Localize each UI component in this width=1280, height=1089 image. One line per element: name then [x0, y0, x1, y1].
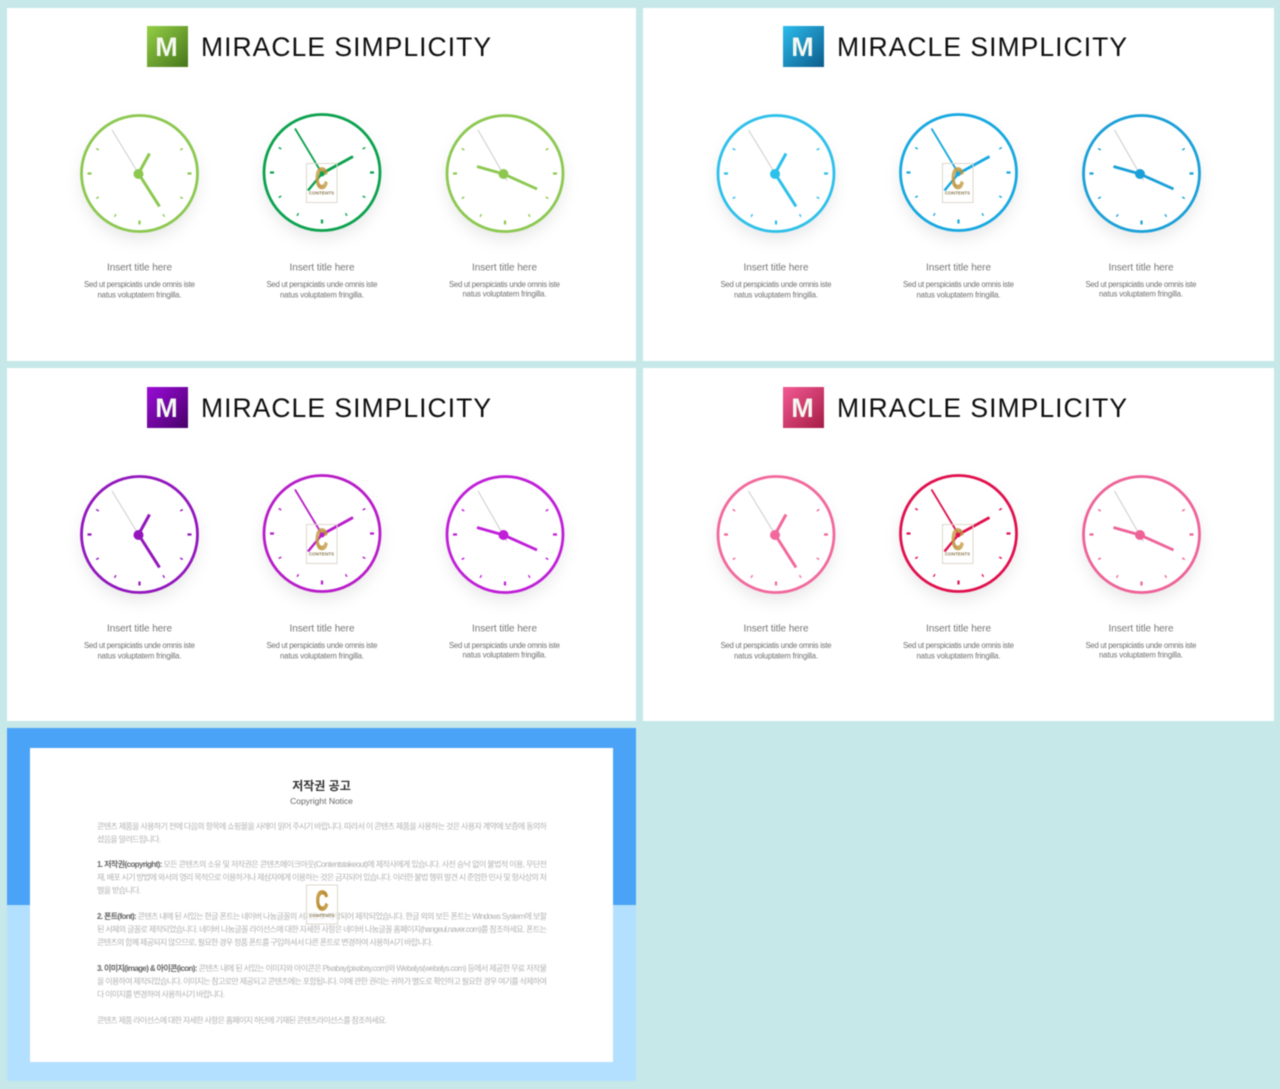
caption: green 2: Sed ut perspiciatis unde omnis iste: [266, 280, 378, 289]
caption: purple 2: Insert title here: [290, 624, 355, 634]
watermark: green panel: C: [315, 163, 328, 196]
icon: pink M logo: [783, 387, 824, 428]
heading: copyright title: 저작권 공고: [292, 778, 351, 793]
text block: section 1 copyright: 벌을 받습니다.: [97, 885, 141, 895]
watermark: green panel: [306, 163, 337, 202]
icon: blue M logo: M: [791, 32, 814, 62]
panel: copyright notice: [7, 728, 636, 1081]
caption: pink 1: Sed ut perspiciatis unde omnis iste: [720, 641, 832, 650]
caption: green 3: Sed ut perspiciatis unde omnis iste: [449, 280, 560, 289]
caption: blue 2: Insert title here: [926, 262, 991, 274]
caption: pink 1: natus voluptatem fringilla.: [734, 652, 818, 660]
watermark: purple panel: CONTENTS: [309, 552, 334, 556]
subheading: copyright notice: Copyright Notice: [290, 796, 353, 806]
caption: blue 3: Insert title here: [1108, 262, 1174, 274]
watermark: green panel: CONTENTS: [309, 190, 334, 196]
watermark: blue panel: [942, 163, 973, 202]
caption: purple 3: [449, 624, 560, 660]
text block: section 3 image and icon: 3. 이미지(image) & 아이콘(icon): 콘텐츠 내에 된 서있는 이미지와 아이콘은 Pixabay(pixabay.com)와 Webalys(webalys.com) 등에서 제공한 무료 저작물: [97, 963, 547, 973]
text block: section 3 image and icon: [97, 963, 547, 999]
clock: green 1: [82, 116, 198, 232]
clock: green 3: [447, 116, 563, 232]
text block: section 1 copyright: 1. 저작권(copyright): 모든 콘텐츠의 소유 및 저작권은 콘텐츠메이크아웃(Contentstakeout)에 제작사에게 있습니다. 사전 승낙 없이 불법적 이용, 무단전: [97, 859, 547, 869]
watermark: copyright panel: CONTENTS: [309, 913, 335, 918]
icon: pink M logo: M: [791, 393, 814, 423]
icon: purple M logo: [147, 387, 188, 428]
clock: blue 1: [718, 116, 834, 232]
watermark: blue panel: CONTENTS: [945, 190, 970, 196]
watermark: purple panel: C: [315, 524, 328, 557]
panel: purple clocks: [7, 368, 636, 721]
watermark: copyright panel: [306, 885, 338, 924]
caption: purple 1: Sed ut perspiciatis unde omnis iste: [84, 641, 195, 650]
text block: section 1 copyright: [97, 859, 547, 895]
caption: green 1: natus voluptatem fringilla.: [98, 290, 182, 300]
text block: intro: 콘텐츠 제품을 사용하기 전에 다음의 항목에 쇼핑몰을 사례이 읽어 주시기 바랍니다. 따라서 이 콘텐츠 제품을 사용하는 것은 사용자 계약에 보증에 동의하: [97, 821, 548, 831]
clock: pink 2: [900, 476, 1016, 592]
caption: pink 1: Insert title here: [744, 624, 809, 634]
text block: section 2 font: 2. 폰트(font): 콘텐츠 내에 된 서있는 한글 폰트는 네이버 나눔글꼴의 서체들로 제작되어 제작되었습니다. 한글 외의 보든 폰트는 Windows System에 보할: [97, 911, 548, 921]
caption: green 3: natus voluptatem fringilla.: [462, 290, 546, 298]
watermark: pink panel: C: [951, 524, 964, 557]
text block: license footer: 콘텐츠 제품 라이선스에 대한 자세한 사항은 홈페이지 하단에 기재된 콘텐츠라이선스를 참조하세요.: [97, 1015, 387, 1025]
caption: purple 1: [84, 624, 195, 660]
caption: purple 2: natus voluptatem fringilla.: [280, 652, 364, 660]
clock: blue 2: [900, 114, 1016, 230]
text block: section 2 font: 콘텐츠의 함께 제공되지 않으므로, 필요한 경우 정품 폰트를 구입하셔서 다른 폰트로 변경하여 사용하시기 바랍니다.: [97, 937, 433, 947]
caption: green 1: Sed ut perspiciatis unde omnis iste: [84, 280, 195, 289]
caption: pink 3: Insert title here: [1108, 624, 1174, 634]
icon: purple M logo: M: [155, 393, 178, 423]
caption: pink 3: Sed ut perspiciatis unde omnis iste: [1086, 641, 1196, 650]
caption: blue 3: Sed ut perspiciatis unde omnis iste: [1086, 280, 1196, 289]
text block: intro: [97, 821, 548, 844]
caption: blue 2: [903, 262, 1014, 300]
caption: blue 2: Sed ut perspiciatis unde omnis iste: [903, 280, 1014, 289]
caption: pink 3: natus voluptatem fringilla.: [1099, 650, 1183, 660]
icon: blue M logo: [783, 26, 824, 67]
caption: green 2: natus voluptatem fringilla.: [280, 290, 364, 300]
clock: purple 3: [447, 476, 563, 592]
caption: green 2: Insert title here: [290, 262, 355, 274]
caption: purple 1: Insert title here: [107, 624, 172, 634]
caption: pink 1: [720, 624, 832, 660]
heading: blue panel: MIRACLE SIMPLICITY: [837, 32, 1127, 62]
panel: pink clocks: [643, 368, 1274, 721]
clock: blue 3: [1084, 116, 1200, 232]
caption: purple 3: natus voluptatem fringilla.: [462, 650, 546, 660]
caption: pink 2: natus voluptatem fringilla.: [916, 652, 1000, 660]
caption: green 1: Insert title here: [107, 262, 172, 274]
caption: pink 2: Sed ut perspiciatis unde omnis iste: [903, 641, 1014, 650]
clock: green 2: [264, 114, 380, 230]
icon: green M logo: M: [155, 32, 178, 62]
watermark: blue panel: C: [951, 163, 964, 196]
caption: blue 3: [1086, 262, 1196, 298]
clock: purple 2: [264, 476, 380, 592]
caption: blue 3: natus voluptatem fringilla.: [1099, 290, 1183, 298]
caption: pink 2: [903, 624, 1014, 660]
watermark: pink panel: [942, 524, 973, 564]
caption: purple 3: Sed ut perspiciatis unde omnis iste: [449, 641, 560, 650]
caption: purple 2: Sed ut perspiciatis unde omnis iste: [266, 641, 378, 650]
watermark: copyright panel: C: [316, 885, 328, 916]
clock: pink 1: [718, 476, 834, 592]
caption: pink 2: Insert title here: [926, 624, 991, 634]
text block: section 1 copyright: 재, 배포 시기 방법에 와서의 영리 목적으로 이용하거나 제삼자에게 이용하는 것은 금지되어 있습니다. 이러한 불법 행위 발견 시 준엄한 민사 및 형사상의 처: [97, 872, 547, 882]
panel: blue clocks: [643, 8, 1274, 361]
caption: blue 1: Sed ut perspiciatis unde omnis iste: [720, 280, 832, 289]
clock: pink 3: [1084, 476, 1200, 592]
caption: green 3: [449, 262, 560, 298]
caption: purple 1: natus voluptatem fringilla.: [98, 652, 182, 660]
caption: green 3: Insert title here: [472, 262, 537, 274]
watermark: pink panel: CONTENTS: [945, 552, 970, 556]
heading: purple panel: MIRACLE SIMPLICITY: [201, 393, 491, 423]
panel: green clocks: [7, 8, 636, 361]
caption: blue 1: [720, 262, 832, 300]
text block: section 3 image and icon: 을 이용하여 제작되었습니다. 이미지는 참고로만 제공되고 콘텐츠에는 포함됩니다. 이에 관한 권리는 귀하가 별도로 확인하고 필요한 경우 여기를 삭제하여: [97, 976, 547, 986]
clock: purple 1: [82, 476, 198, 592]
caption: pink 3: [1086, 624, 1196, 660]
watermark: purple panel: [306, 524, 337, 564]
heading: pink panel: MIRACLE SIMPLICITY: [837, 393, 1127, 423]
caption: green 2: [266, 262, 378, 300]
icon: green M logo: [147, 26, 188, 67]
caption: green 1: [84, 262, 195, 300]
caption: blue 1: Insert title here: [744, 262, 809, 274]
text block: section 2 font: 된 서체의 글꼴로 제작되었습니다. 네이버 나눔글꼴 라이선스에 대한 자세한 사항은 네이버 나눔글꼴 홈페이지(hangeul.naver.com)를 참조하세요. 폰트는: [97, 924, 547, 934]
text block: intro: 셨음을 알려드립니다.: [97, 834, 161, 844]
caption: blue 2: natus voluptatem fringilla.: [916, 290, 1000, 300]
caption: purple 3: Insert title here: [472, 624, 537, 634]
text block: section 2 font: [97, 911, 548, 947]
caption: purple 2: [266, 624, 378, 660]
caption: blue 1: natus voluptatem fringilla.: [734, 290, 818, 300]
heading: green panel: MIRACLE SIMPLICITY: [201, 32, 491, 62]
text block: section 3 image and icon: 다 이미지를 변경하여 사용하시기 바랍니다.: [97, 989, 225, 999]
